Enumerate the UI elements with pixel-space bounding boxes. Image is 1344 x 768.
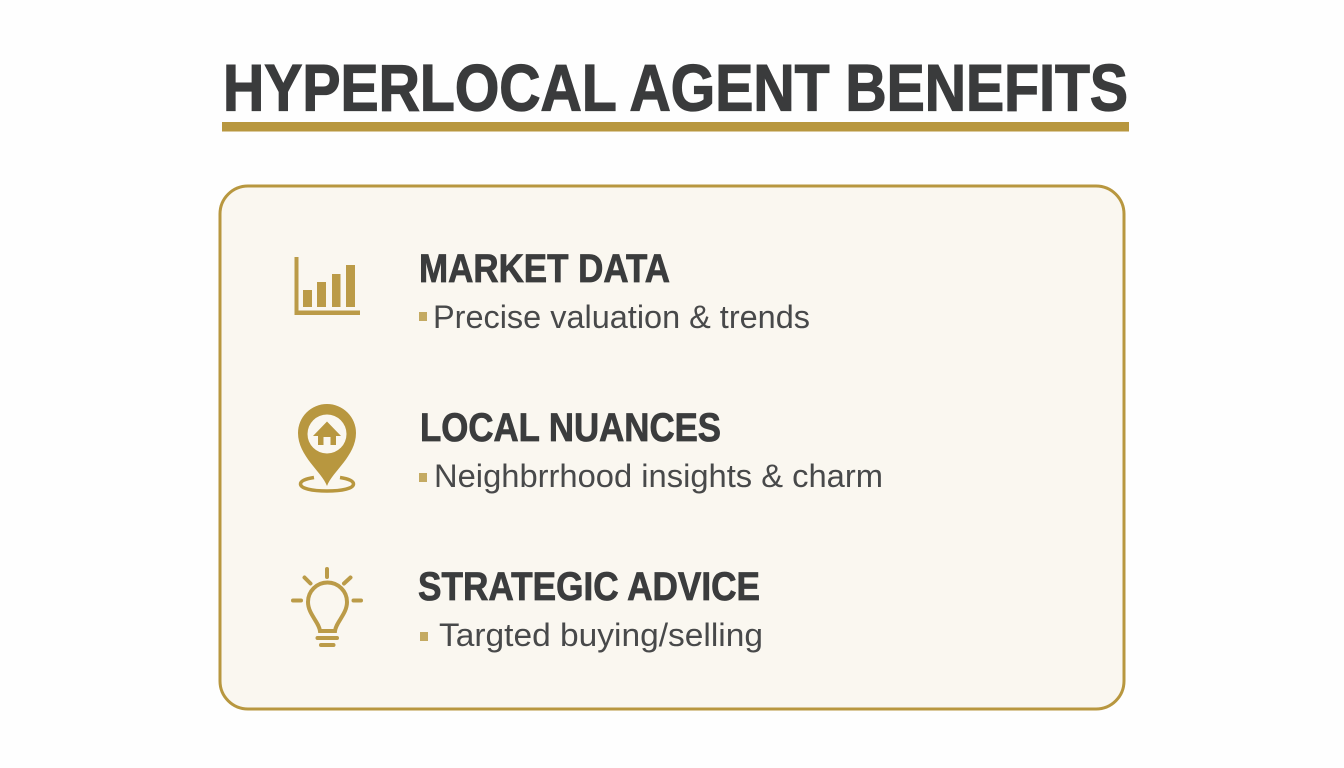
title: HYPERLOCAL AGENT BENEFITS xyxy=(223,50,1128,124)
icon: location pin with house xyxy=(298,404,356,491)
heading: market data: MARKET DATA xyxy=(419,247,670,291)
bullet: strategic advice xyxy=(420,632,428,641)
icon: light bulb xyxy=(293,569,361,645)
text: local nuances detail: Neighbrrhood insights & charm xyxy=(434,458,883,494)
bullet: local nuances xyxy=(419,473,427,482)
icon: bar chart xyxy=(294,257,360,315)
heading: strategic advice: STRATEGIC ADVICE xyxy=(418,565,760,609)
text: market data detail: Precise valuation & trends xyxy=(433,299,810,335)
text: strategic advice detail: Targted buying/selling xyxy=(439,617,763,653)
heading: local nuances: LOCAL NUANCES xyxy=(420,406,721,450)
panel: benefits xyxy=(220,186,1124,709)
bullet: market data xyxy=(419,312,427,321)
